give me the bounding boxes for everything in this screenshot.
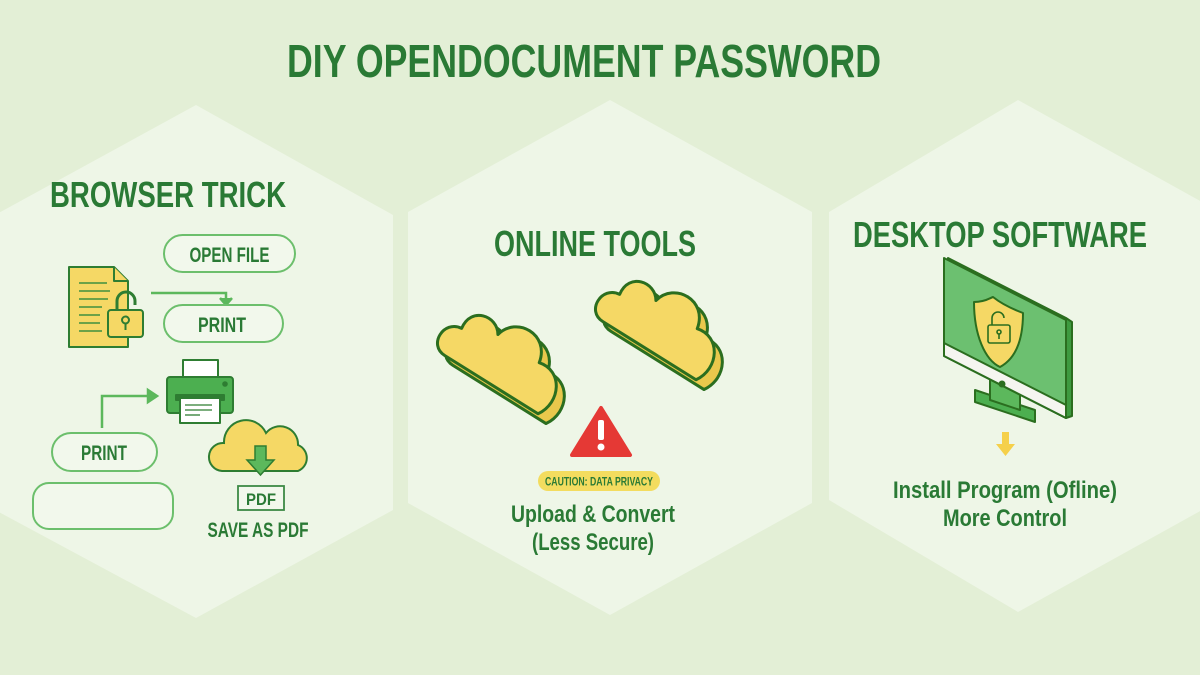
icon: warning — [572, 408, 630, 455]
text: upload & convert: (Less Secure) — [532, 529, 654, 556]
label: pdf — [238, 486, 284, 510]
arrow: doc to print — [151, 293, 232, 305]
text: upload & convert — [511, 501, 675, 556]
button: open file — [164, 235, 295, 272]
empty button — [33, 483, 173, 529]
icon: unlocked document — [69, 267, 143, 347]
icon: printer — [167, 360, 233, 423]
button: open file: OPEN FILE — [190, 244, 270, 267]
panel: browser trick — [0, 105, 393, 618]
icon: monitor — [944, 258, 1072, 422]
arrow: down — [996, 432, 1015, 456]
title: DIY OPENDOCUMENT PASSWORD — [287, 35, 881, 87]
text: install program — [893, 477, 1117, 532]
icon: cloud left — [430, 292, 588, 426]
arrow: print to printer — [102, 390, 157, 428]
text: upload & convert: Upload & Convert — [511, 501, 675, 528]
heading: online tools: ONLINE TOOLS — [494, 223, 696, 264]
text: install program: More Control — [943, 505, 1067, 532]
label: pdf: PDF — [246, 490, 276, 509]
button: print 2: PRINT — [81, 442, 127, 465]
text: install program: Install Program (Ofline) — [893, 477, 1117, 504]
caution badge — [538, 471, 660, 491]
icon: cloud download — [209, 420, 307, 475]
panel: desktop software — [829, 100, 1200, 612]
heading: browser trick: BROWSER TRICK — [50, 174, 286, 215]
panel: online tools — [408, 100, 812, 615]
button: print 2 — [52, 433, 157, 471]
button: print: PRINT — [198, 314, 246, 337]
button: print — [164, 305, 283, 342]
caution badge: CAUTION: DATA PRIVACY — [545, 474, 653, 488]
label: save as pdf: SAVE AS PDF — [208, 519, 309, 542]
icon: cloud right — [588, 258, 746, 392]
